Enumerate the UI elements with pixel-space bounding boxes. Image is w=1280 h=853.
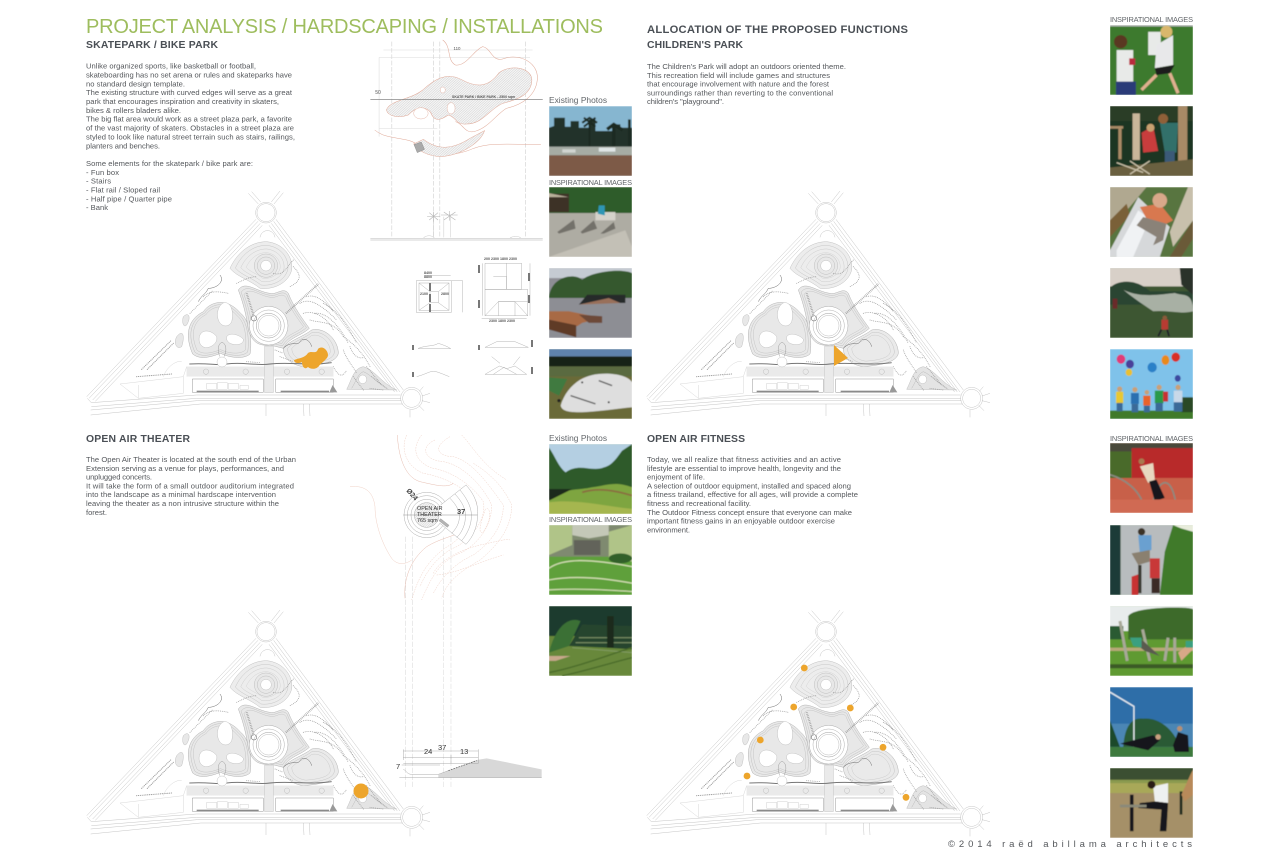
photo: soccer goal exercise bbox=[1110, 687, 1193, 757]
theater plan and section drawing: 13 bbox=[460, 747, 468, 756]
label: inspirational images fitness: INSPIRATIONAL IMAGES bbox=[1110, 434, 1193, 443]
label: inspirational images theater: INSPIRATIONAL IMAGES bbox=[549, 515, 632, 524]
text block: skatepark description: The big flat area would work as a street plaza park, a favorite bbox=[86, 115, 292, 124]
text block: theater description bbox=[86, 455, 296, 517]
text block: fitness description bbox=[647, 455, 858, 534]
text block: skatepark description: of the vast majority of skaters. Obstacles in a street plaza are bbox=[86, 124, 294, 133]
skate element detail drawings: 8400 bbox=[424, 271, 432, 275]
panel: allocation / children's park bbox=[647, 24, 909, 106]
text block: fitness description: Today, we all realize that fitness activities and an active bbox=[647, 455, 841, 464]
panel: open air fitness bbox=[647, 434, 858, 534]
text block: children's park description: surroundings rather than reverting to the conventional bbox=[647, 88, 833, 97]
theater plan and section drawing: Ø24 bbox=[405, 488, 419, 502]
text block: fitness description: The Outdoor Fitness concept ensure that everyone can make bbox=[647, 508, 852, 517]
text block: fitness description: fitness and recreational facility. bbox=[647, 499, 751, 508]
theater plan and section drawing: 37 bbox=[457, 507, 465, 516]
theater plan and section drawing: OPEN AIR bbox=[417, 506, 443, 512]
master plan: skatepark location bbox=[87, 191, 430, 417]
skatepark plan drawing: 50 bbox=[375, 90, 381, 96]
text block: theater description: Extension serving as a venue for plays, performances, and bbox=[86, 464, 284, 473]
text block: skatepark description: - Fun box bbox=[86, 168, 119, 177]
text block: skatepark description: - Flat rail / Sloped rail bbox=[86, 186, 160, 194]
text block: skatepark description: The existing structure with curved edges will serve as a great bbox=[86, 88, 293, 97]
label: inspirational images: INSPIRATIONAL IMAGES bbox=[549, 178, 632, 187]
photo: children climbing net bbox=[1110, 106, 1193, 176]
skate element detail drawings: 2300 1800 2300 bbox=[489, 319, 515, 323]
text block: fitness description: environment. bbox=[647, 525, 690, 534]
text block: skatepark description bbox=[86, 62, 295, 212]
footer credit: ©2014 raëd abillama architects bbox=[948, 839, 1192, 850]
text block: skatepark description: - Stairs bbox=[86, 177, 111, 186]
skatepark plan drawing bbox=[370, 40, 543, 240]
master plan: theater location bbox=[87, 610, 430, 836]
master plan: children's park location bbox=[647, 191, 990, 417]
heading: open air fitness: OPEN AIR FITNESS bbox=[647, 434, 745, 445]
text block: theater description: The Open Air Theater is located at the south end of the Urban bbox=[86, 455, 296, 464]
highlight: theater location bbox=[354, 784, 368, 798]
photo: children running bbox=[1110, 25, 1193, 95]
photo: children with balloons bbox=[1110, 349, 1193, 419]
theater plan and section drawing: THEATER bbox=[417, 512, 442, 518]
heading: open air theater: OPEN AIR THEATER bbox=[86, 434, 190, 445]
photo: stepped grass amphitheater bbox=[549, 606, 632, 676]
skate element detail drawings: 200 2300 1800 2300 bbox=[484, 257, 517, 261]
theater plan and section drawing: 7 bbox=[396, 762, 400, 771]
photo: giant bubbles in field bbox=[1110, 268, 1193, 338]
photo: existing green slope bbox=[549, 444, 632, 514]
text block: theater description: It will take the form of a small outdoor auditorium integrated bbox=[86, 481, 294, 490]
photo: existing skate site bbox=[549, 106, 632, 176]
text block: children's park description: The Children's Park will adopt an outdoors oriented theme. bbox=[647, 62, 846, 71]
text block: theater description: unplugged concerts. bbox=[86, 473, 152, 482]
panel: open air theater bbox=[86, 434, 542, 788]
text block: children's park description bbox=[647, 62, 846, 106]
photo: concrete skate ramps bbox=[549, 187, 632, 257]
text block: children's park description: This recreation field will include games and structures bbox=[647, 71, 830, 80]
heading: children's park: CHILDREN'S PARK bbox=[647, 40, 743, 51]
photo: white skate bowl bbox=[549, 349, 632, 419]
heading: allocation of functions: ALLOCATION OF THE PROPOSED FUNCTIONS bbox=[647, 24, 909, 36]
text block: skatepark description: no standard design template. bbox=[86, 79, 185, 88]
skate element detail drawings bbox=[412, 257, 533, 377]
text block: fitness description: A selection of outdoor equipment, installed and spaced along bbox=[647, 481, 851, 490]
text block: fitness description: enjoyment of life. bbox=[647, 473, 705, 482]
text block: children's park description: children's "playground". bbox=[647, 97, 724, 106]
text block: fitness description: important fitness gains in an enjoyable outdoor exercise bbox=[647, 517, 835, 526]
highlight: children's park footprint bbox=[834, 345, 848, 366]
highlight: skatepark footprint bbox=[294, 348, 328, 369]
text block: skatepark description: styled to look like natural street terrain such as stairs, railings, bbox=[86, 132, 295, 141]
title: PROJECT ANALYSIS / HARDSCAPING / INSTALLATIONS bbox=[86, 16, 603, 38]
text block: theater description: leaving the theater as a non intrusive structure within the bbox=[86, 499, 279, 508]
text block: skatepark description: bikes & rollers bladers alike. bbox=[86, 106, 181, 115]
skate element detail drawings: 8800 bbox=[424, 275, 432, 279]
label: existing photos theater: Existing Photos bbox=[549, 433, 607, 443]
photo: grass amphitheater bbox=[549, 525, 632, 595]
text block: fitness description: a fitness trailand, effective for all ages, will provide a complete bbox=[647, 490, 858, 499]
text block: theater description: forest. bbox=[86, 508, 107, 517]
photo: red fitness court bbox=[1110, 443, 1193, 513]
text block: skatepark description: - Bank bbox=[86, 203, 108, 212]
photo: child on slide bbox=[1110, 187, 1193, 257]
text block: children's park description: that encourage involvement with nature and the forest bbox=[647, 80, 830, 89]
text block: skatepark description: Unlike organized sports, like basketball or football, bbox=[86, 62, 256, 71]
theater plan and section drawing: 24 bbox=[424, 747, 432, 756]
label: existing photos: Existing Photos bbox=[549, 95, 607, 105]
skatepark plan drawing: SKATE PARK / BIKE PARK - 2500 sqm bbox=[452, 95, 515, 99]
photo: leg stretch station bbox=[1110, 768, 1193, 838]
master plan: fitness locations bbox=[647, 610, 990, 836]
skate element detail drawings: 2800 bbox=[441, 292, 449, 296]
theater plan and section drawing bbox=[350, 435, 542, 788]
label: inspirational images children: INSPIRATIONAL IMAGES bbox=[1110, 15, 1193, 24]
text block: skatepark description: - Half pipe / Quarter pipe bbox=[86, 194, 172, 203]
text block: skatepark description: planters and benches. bbox=[86, 141, 160, 150]
photo: climbing wall bbox=[1110, 525, 1193, 595]
theater plan and section drawing: 765 sqm bbox=[417, 518, 438, 524]
theater plan and section drawing: 37 bbox=[438, 743, 446, 752]
photo: plaza ramps bbox=[549, 268, 632, 338]
skate element detail drawings: 2100 bbox=[420, 292, 428, 296]
text block: skatepark description: Some elements for the skatepark / bike park are: bbox=[86, 159, 253, 168]
text block: skatepark description: park that encourages inspiration and creativity in skaters, bbox=[86, 97, 279, 106]
text block: skatepark description: skateboarding has no set arena or rules and skateparks have bbox=[86, 70, 292, 80]
highlights: fitness stations bbox=[744, 665, 909, 801]
skatepark plan drawing: 110 bbox=[454, 46, 461, 51]
text block: theater description: into the landscape as a minimal hardscape intervention bbox=[86, 490, 276, 499]
photo: outdoor push-up stations bbox=[1110, 606, 1193, 676]
heading: skatepark: SKATEPARK / BIKE PARK bbox=[86, 40, 218, 51]
panel: skatepark / bike park bbox=[86, 40, 543, 377]
text block: fitness description: lifestyle are essential to improve health, longevity and the bbox=[647, 464, 841, 473]
